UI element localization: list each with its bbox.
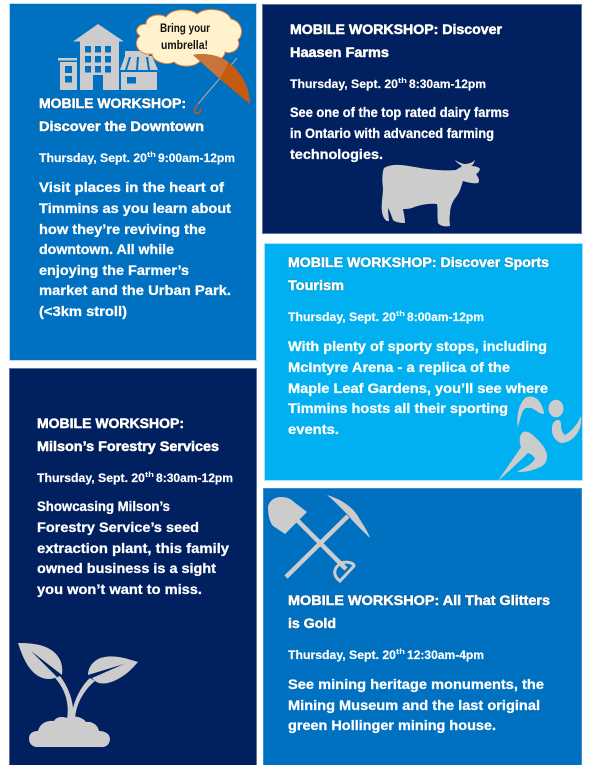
heading [288, 593, 550, 631]
body text: With plenty of sporty stops, including [288, 339, 547, 354]
panel: All That Glitters is Gold [264, 488, 582, 765]
date [290, 78, 486, 91]
date: 8:30am-12pm [409, 79, 486, 91]
date: Thursday, Sept. 20 [37, 473, 145, 485]
body text [37, 499, 230, 597]
icon: runner [498, 397, 581, 481]
heading: Discover the Downtown [39, 119, 204, 134]
panel: Sports Tourism [264, 244, 582, 481]
heading: Milson’s Forestry Services [37, 439, 219, 454]
date [288, 311, 484, 324]
callout: Bring your umbrella cloud: Bring your [160, 23, 210, 35]
body text: how they’re reviving the [39, 222, 207, 237]
heading: MOBILE WORKSHOP: [39, 96, 186, 111]
icon: umbrella [193, 54, 250, 113]
heading: MOBILE WORKSHOP: Discover Sports [288, 255, 549, 270]
body text: See one of the top rated dairy farms [290, 105, 509, 120]
date: Thursday, Sept. 20 [288, 650, 396, 662]
body text: Forestry Service’s seed [37, 520, 199, 535]
body text [39, 180, 232, 319]
callout: Bring your umbrella cloud [136, 10, 242, 66]
body text: See mining heritage monuments, the [288, 677, 545, 692]
body text: (<3km stroll) [39, 304, 127, 319]
body text: Timmins as you learn about [39, 201, 232, 216]
body text: market and the Urban Park. [39, 283, 231, 298]
heading [290, 22, 503, 60]
date [37, 472, 233, 485]
body text: Showcasing Milson’s [37, 499, 170, 514]
body text [288, 339, 549, 437]
icon: shovel and pickaxe [268, 495, 370, 581]
date: Thursday, Sept. 20 [288, 312, 396, 324]
date: 8:30am-12pm [156, 473, 233, 485]
callout: Bring your umbrella cloud: umbrella! [161, 40, 208, 52]
body text: owned business is a sight [37, 561, 217, 576]
body text: Visit places in the heart of [39, 180, 225, 195]
panel: Haasen Farms [262, 4, 582, 234]
heading [39, 96, 204, 134]
body text: you won’t want to miss. [37, 582, 202, 597]
date: th [147, 152, 156, 159]
heading: is Gold [288, 616, 336, 631]
body text: McIntyre Arena - a replica of the [288, 360, 511, 375]
body text: enjoying the Farmer’s [39, 263, 189, 278]
date: th [396, 649, 405, 656]
body text: in Ontario with advanced farming [290, 126, 494, 141]
date: 8:00am-12pm [407, 312, 484, 324]
panel: Discover the Downtown [10, 4, 256, 360]
date: th [398, 78, 407, 85]
body text: technologies. [290, 147, 383, 162]
body text: Mining Museum and the last original [288, 698, 540, 713]
date: Thursday, Sept. 20 [39, 153, 147, 165]
panel: Milson's Forestry Services [10, 368, 256, 765]
body text: extraction plant, this family [37, 541, 230, 556]
date [288, 649, 484, 662]
heading: MOBILE WORKSHOP: [37, 416, 184, 431]
date: 12:30am-4pm [407, 650, 484, 662]
body text: Maple Leaf Gardens, you’ll see where [288, 381, 549, 396]
body text: green Hollinger mining house. [288, 718, 496, 733]
body text: Timmins hosts all their sporting [288, 401, 508, 416]
heading: MOBILE WORKSHOP: All That Glitters [288, 593, 550, 608]
body text [288, 677, 545, 733]
icon: buildings [58, 24, 158, 90]
heading [288, 255, 549, 293]
icon: cow [382, 160, 480, 226]
date [39, 152, 235, 165]
body text: events. [288, 422, 339, 437]
date: th [396, 311, 405, 318]
heading: MOBILE WORKSHOP: Discover [290, 22, 503, 37]
heading: Haasen Farms [290, 45, 389, 60]
date: Thursday, Sept. 20 [290, 79, 398, 91]
date: th [145, 472, 154, 479]
date: 9:00am-12pm [158, 153, 235, 165]
heading: Tourism [288, 278, 344, 293]
body text [290, 105, 509, 162]
icon: sprout [18, 643, 138, 747]
body text: downtown. All while [39, 242, 175, 257]
heading [37, 416, 219, 454]
